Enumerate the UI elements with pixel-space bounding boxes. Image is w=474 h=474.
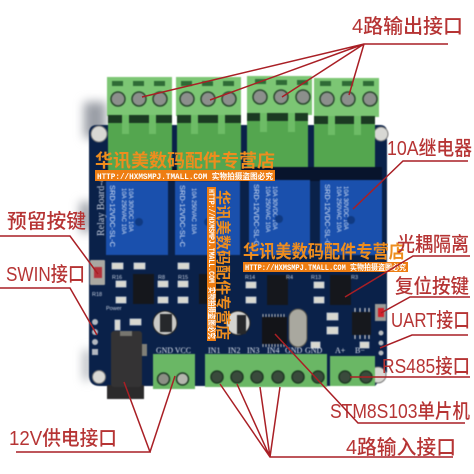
silk reference designators: R16 <box>112 275 122 281</box>
relay 4: SRD-12VDC-SL-C <box>323 184 332 247</box>
SMD resistors <box>112 263 369 348</box>
watermark 2 vertical <box>206 187 232 341</box>
label: 12V供电接口: 12V供电接口 <box>9 427 117 450</box>
SOP8 chip <box>352 308 371 339</box>
watermark 2 vertical: HTTP://HXMSMPJ.TMALL.COM 实物拍摄盗图必究 <box>206 189 217 339</box>
relay 4: 10A 30VDC 10A <box>342 186 348 230</box>
label: 复位按键: 复位按键 <box>395 275 469 298</box>
relay 2 <box>175 181 240 255</box>
label: STM8S103单片机 <box>275 334 470 423</box>
label: UART接口 <box>380 309 470 348</box>
reset button <box>375 304 386 321</box>
relay 2: SRD-12VDC-SL-C <box>178 185 187 248</box>
relay 3: 10A 30VDC 10A <box>271 186 277 230</box>
silk labels: IN3 <box>247 346 259 355</box>
silk labels: IN4 <box>267 346 279 355</box>
STM8S103 chip <box>262 314 287 347</box>
silk labels: IN2 <box>228 346 240 355</box>
photo: relay board <box>89 76 388 399</box>
label: 12V供电接口 <box>9 376 175 452</box>
silk reference designators: R15 <box>178 275 188 281</box>
mounting holes <box>91 126 388 384</box>
SWIN header <box>92 319 98 355</box>
silk reference designators <box>92 275 358 312</box>
dark strip under terminals <box>106 167 382 181</box>
silk labels: GND VCC <box>156 346 191 355</box>
silk labels: IN1 <box>208 346 220 355</box>
silk labels: GND <box>285 346 303 355</box>
silk labels: A+ <box>335 346 346 355</box>
watermark 2 vertical: 华讯美数码配件专营店 <box>214 190 232 340</box>
relay 1: 10A 30VDC 10A <box>127 188 133 232</box>
label: SWIN接口: SWIN接口 <box>6 263 85 286</box>
output terminal block 2 <box>176 77 241 175</box>
label: 4路输入接口: 4路输入接口 <box>346 436 456 459</box>
output terminal block 3 <box>247 76 312 167</box>
reserved button <box>90 260 105 285</box>
relay 1 <box>106 181 168 255</box>
label: 4路输入接口 <box>220 384 456 459</box>
UART header <box>378 330 384 356</box>
RS485 terminal block <box>330 356 375 386</box>
relay 3: SRD-12VDC-SL-C <box>252 184 261 247</box>
relay 1: SRD-12VDC-SL-C <box>108 185 117 248</box>
DC power jack <box>107 331 147 399</box>
power terminal block <box>153 354 195 389</box>
label: 预留按键 <box>0 210 98 274</box>
watermark 3: 华讯美数码配件专营店 <box>243 241 405 262</box>
silk reference designators: R14 <box>245 275 255 281</box>
electrolytic capacitor 2 <box>226 311 250 335</box>
silk labels <box>96 177 365 355</box>
relay 3: 10A 250VAC 10A <box>264 186 270 232</box>
label: SWIN接口 <box>0 263 97 335</box>
relay 3 <box>249 180 310 255</box>
silk labels: GND <box>305 346 323 355</box>
silk reference designators: R13 <box>311 275 321 281</box>
input terminal block <box>205 354 327 387</box>
relay 2: 10A 250VAC 10A <box>190 188 196 234</box>
label: 光耦隔离 <box>345 233 470 297</box>
label: 预留按键: 预留按键 <box>7 210 86 233</box>
silk reference designators: R8 <box>158 275 165 281</box>
output terminal block 4 <box>314 78 379 167</box>
circuit board <box>89 125 387 386</box>
relay 4 <box>320 180 382 255</box>
watermark 3: HTTP://HXMSMPJ.TMALL.COM 实物拍摄盗图必究 <box>245 262 406 273</box>
label: 10A继电器 <box>353 137 472 209</box>
electrolytic capacitor 1 <box>153 311 177 335</box>
label: RS485接口 <box>350 355 470 378</box>
relay 1: 10A 250VAC 10A <box>120 188 126 234</box>
watermark 3 <box>243 241 408 273</box>
optocouplers <box>133 274 351 305</box>
output terminal block 1 <box>107 77 172 175</box>
silk labels: Relay Board-4 <box>96 177 107 236</box>
label: 复位按键 <box>381 275 470 313</box>
silk reference designators: R18 <box>92 292 102 298</box>
watermark 1: 华讯美数码配件专营店 <box>95 150 275 171</box>
silk reference designators: Power <box>106 306 122 312</box>
relay 4: 10A 250VAC 10A <box>335 186 341 232</box>
crystal <box>289 309 307 347</box>
silk reference designators: R3 <box>351 275 358 281</box>
silk reference designators: R4 <box>286 275 293 281</box>
watermark 1 <box>95 150 275 182</box>
watermark 1: HTTP://HXMSMPJ.TMALL.COM 实物拍摄盗图必究 <box>97 171 273 182</box>
board shadow <box>80 102 106 380</box>
label: 4路输出接口: 4路输出接口 <box>352 15 463 38</box>
silk labels: B− <box>355 346 365 355</box>
label: 4路输出接口 <box>142 15 463 100</box>
